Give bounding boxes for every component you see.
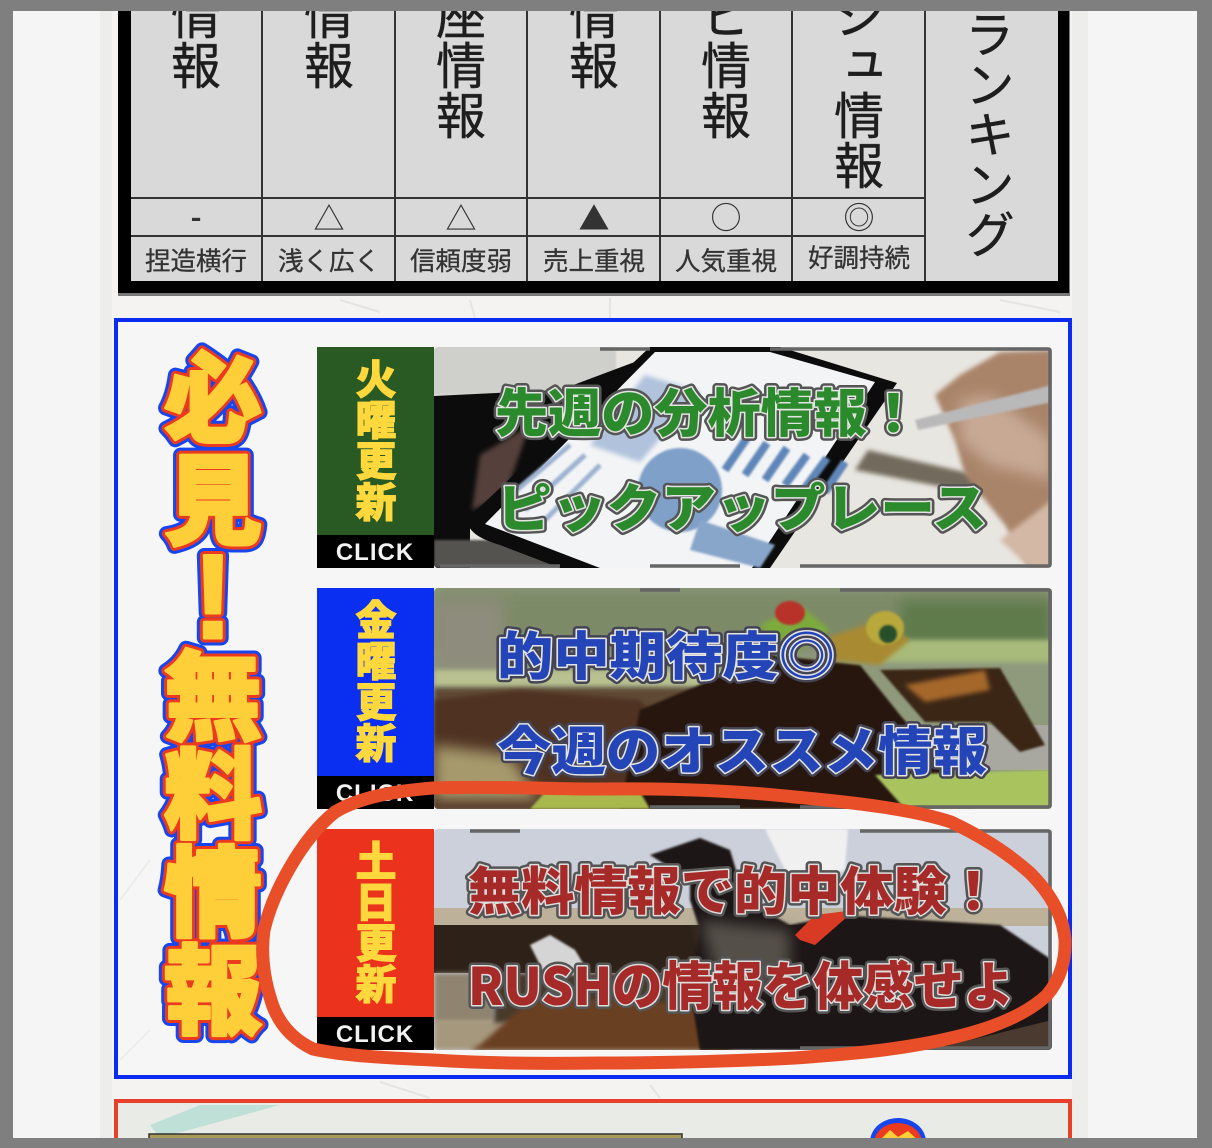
title bar, cropped — [149, 1134, 682, 1144]
tab: Friday update: 金曜更新 — [346, 599, 406, 763]
tab: Tuesday update — [317, 347, 434, 568]
vertical heading: 必 — [164, 345, 262, 455]
icon: burst — [870, 1118, 926, 1148]
tab: Tuesday update: 火曜更新 — [346, 358, 406, 522]
banner headline: 的中期待度◎ — [497, 615, 835, 690]
ranking table — [118, 0, 1070, 296]
banner headline — [495, 372, 987, 542]
vertical heading: 料 — [164, 741, 262, 851]
photo: racing horses — [434, 588, 1052, 809]
vertical heading: 報 — [164, 937, 262, 1047]
rating notes: 信頼度弱 — [410, 241, 512, 278]
banner headline: 無料情報で的中体験！ — [468, 850, 1000, 925]
tab: weekend update: 土日更新 — [346, 840, 406, 1004]
banner: Tuesday analysis — [317, 340, 1052, 568]
vertical heading: 無 — [164, 643, 262, 753]
banner headline: 先週の分析情報！ — [495, 372, 920, 447]
rating marks: △ — [446, 194, 476, 239]
rating notes: 捏造横行 — [145, 241, 247, 278]
vertical heading: ! — [193, 530, 233, 664]
tab: Friday update — [317, 588, 434, 809]
banner headline: ピックアップレース — [497, 467, 987, 542]
tab: Tuesday update: CLICK — [336, 539, 414, 566]
photo: tablet and hand — [426, 340, 1052, 568]
banner headline: 無料情報で的中体験！ — [468, 850, 1000, 925]
vertical heading: 料 — [164, 741, 262, 851]
banner headline: RUSHの情報を体感せよ — [468, 945, 1014, 1020]
tab: weekend update — [317, 829, 434, 1050]
banner frame — [440, 349, 1050, 566]
rating marks: ▲ — [578, 194, 610, 239]
banner: Friday recommendation — [317, 588, 1052, 809]
tab: Friday update: CLICK — [336, 780, 414, 807]
vertical heading: 料 — [164, 741, 262, 851]
vertical heading: 報 — [164, 937, 262, 1047]
rating marks: ○ — [710, 193, 742, 238]
rating marks: △ — [314, 194, 344, 239]
banner headline: 的中期待度◎ — [497, 615, 835, 690]
banner: weekend free trial — [317, 829, 1052, 1050]
banner headline: ピックアップレース — [497, 467, 987, 542]
column heading 7 ranking: ランキング — [954, 9, 1026, 259]
rating notes: 売上重視 — [543, 241, 645, 278]
vertical heading: 情 — [164, 839, 262, 949]
photo: horses on turf — [434, 829, 1052, 1050]
vertical heading: 報 — [164, 937, 262, 1047]
vertical heading — [164, 345, 262, 1047]
vertical heading: 見 — [164, 447, 262, 557]
vertical heading: 無 — [164, 643, 262, 753]
tab: weekend update: CLICK — [336, 1021, 414, 1048]
vertical heading: 見 — [164, 447, 262, 557]
rating marks: ◎ — [844, 193, 874, 238]
rating notes: 好調持続 — [808, 238, 910, 275]
banner headline — [468, 850, 1014, 1020]
banner headline: RUSHの情報を体感せよ — [468, 945, 1014, 1020]
banner frame — [640, 590, 1050, 807]
vertical heading: 無 — [164, 643, 262, 753]
vertical heading: 情 — [164, 839, 262, 949]
vertical heading: ! — [193, 530, 233, 664]
rating marks — [192, 202, 873, 232]
vertical heading: 情 — [164, 839, 262, 949]
vertical heading: 見 — [164, 447, 262, 557]
vertical heading: ! — [193, 530, 233, 664]
rating notes: 浅く広く — [278, 241, 380, 278]
panel: next section, cropped — [116, 1101, 1070, 1148]
banner headline: 今週のオススメ情報 — [497, 710, 987, 785]
vertical heading: 必 — [164, 345, 262, 455]
banner headline: 先週の分析情報！ — [495, 372, 920, 447]
vertical heading: 必 — [164, 345, 262, 455]
rating marks: - — [190, 193, 202, 237]
banner headline: 今週のオススメ情報 — [497, 710, 987, 785]
banner frame — [470, 831, 1050, 1048]
hand-drawn red circle annotation — [263, 787, 1065, 1063]
panel: free information — [116, 320, 1070, 1077]
rating notes: 人気重視 — [675, 241, 777, 278]
banner headline — [497, 615, 987, 785]
rating notes — [146, 245, 910, 273]
